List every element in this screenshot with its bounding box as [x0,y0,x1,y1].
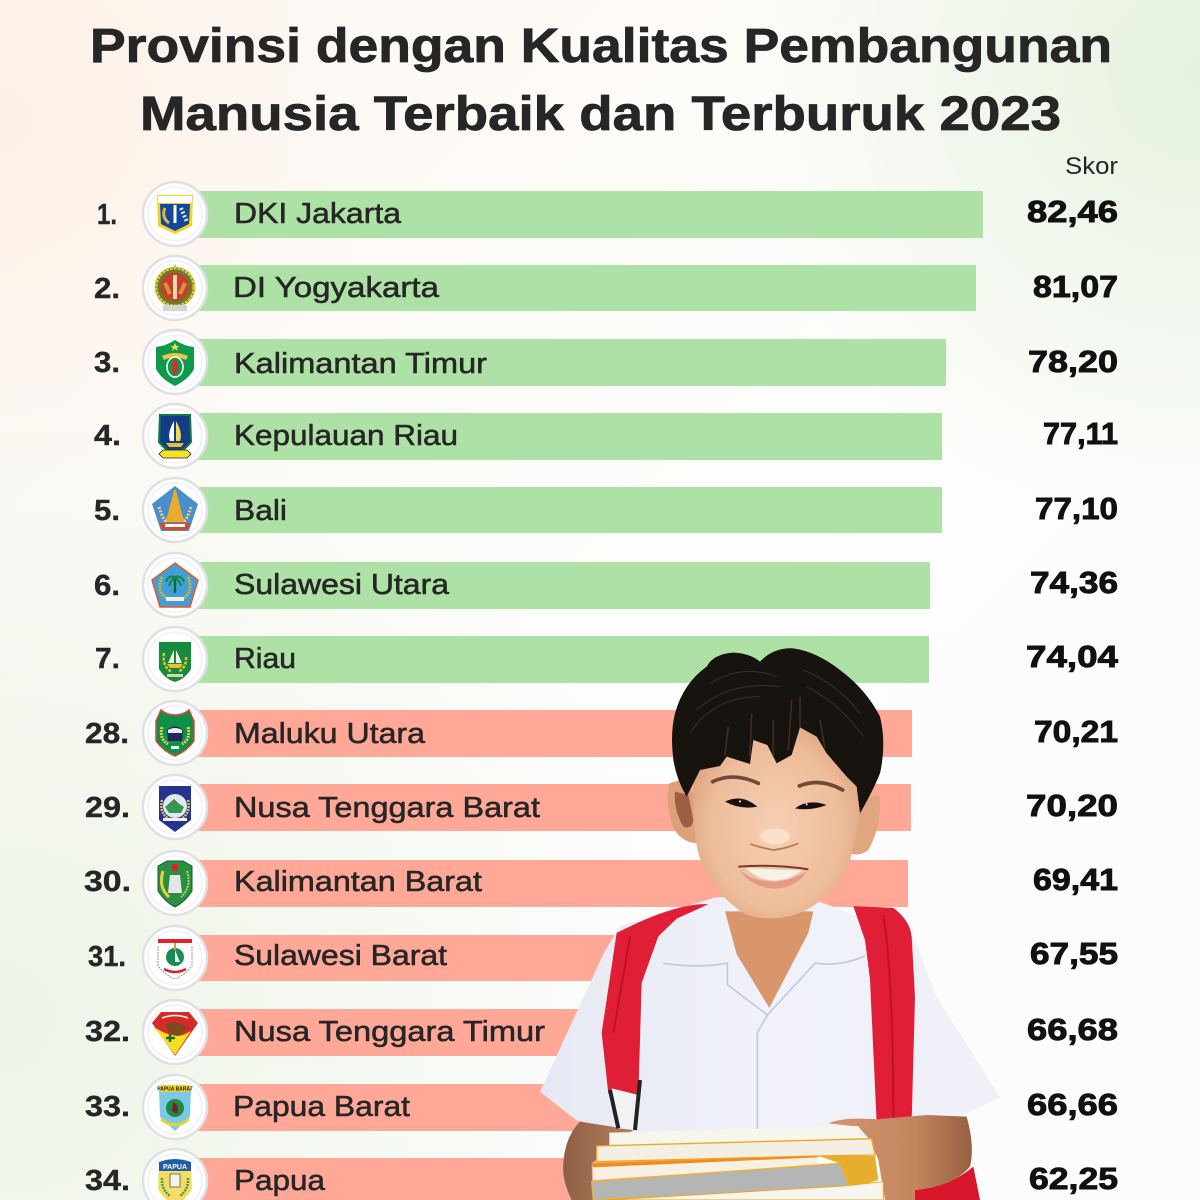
province names: Sulawesi Barat [234,940,447,972]
rank numbers: 29. [85,792,130,824]
province names: Kalimantan Barat [234,866,482,898]
backpack straps [602,904,915,1123]
province names: Kalimantan Timur [234,348,487,380]
neck [725,911,813,1008]
icon: Papua Barat emblem: PAPUA BARAT [157,1086,193,1092]
score values: 70,21 [1034,714,1118,749]
score values: 66,66 [1027,1087,1118,1122]
backpack base [915,1167,980,1200]
ears [668,780,880,854]
rank numbers: 5. [94,495,120,527]
score values: 66,68 [1027,1012,1118,1047]
icon: Kalimantan Timur emblem [156,340,194,386]
face [693,717,859,918]
province names: Papua Barat [233,1091,410,1123]
rank numbers: 28. [85,718,129,750]
rank numbers [84,199,131,1197]
icon: Sulawesi Barat emblem [158,939,192,979]
eyes [725,798,827,809]
hair [672,648,883,813]
bar chart: provincial scores [84,182,1119,1200]
bars: worst provinces [175,710,912,1200]
rank numbers: 33. [85,1091,130,1123]
rank numbers: 1. [97,199,117,231]
score values [1026,194,1119,1196]
rank numbers: 4. [94,420,121,452]
rank numbers: 3. [94,347,120,379]
icon: Kepulauan Riau emblem [159,415,191,458]
score values: 77,10 [1035,491,1118,526]
fringe brown tips [725,697,825,757]
province names: Papua [234,1165,326,1197]
shirt, neck and backpack straps [540,897,1000,1138]
icon: Nusa Tenggara Barat emblem [159,786,191,832]
rank numbers: 30. [84,866,131,898]
score values: 81,07 [1033,269,1118,304]
rank numbers: 31. [88,941,126,973]
province names: Bali [234,495,287,527]
icon: DKI Jakarta emblem [157,195,193,234]
score values: 74,04 [1026,639,1119,674]
smile [738,866,808,889]
title: Manusia Terbaik dan Terburuk 2023 [140,88,1061,141]
badge rings [143,182,207,1200]
icon: Nusa Tenggara Timur emblem [152,1012,198,1056]
score values: 82,46 [1027,194,1118,229]
province names: Nusa Tenggara Barat [234,792,540,824]
icon: Kalimantan Barat emblem [158,861,192,907]
rank numbers: 32. [85,1016,130,1048]
province names: Kepulauan Riau [234,420,458,452]
score values: 69,41 [1033,862,1118,897]
score values: 78,20 [1028,344,1118,379]
score values: 62,25 [1029,1161,1118,1196]
head [668,648,883,918]
icon: DI Yogyakarta emblem [155,264,195,311]
score values: 74,36 [1030,565,1118,600]
province names: DI Yogyakarta [233,272,440,304]
hair strands [690,670,863,737]
right arm and hand [828,1115,972,1200]
icon: Sulawesi Utara emblem [152,563,198,607]
icon: Papua Barat emblem [157,1085,193,1131]
score values: 67,55 [1030,936,1118,971]
left arm [563,1122,633,1200]
rank numbers: 7. [95,643,120,675]
icon: Bali emblem [152,486,198,531]
score values: 70,20 [1026,788,1118,823]
score column heading: Skor [1065,153,1118,180]
score values: 77,11 [1043,416,1118,451]
rank numbers: 2. [94,273,120,305]
province names: Sulawesi Utara [234,569,450,601]
province names: Maluku Utara [234,718,426,750]
province names [233,198,545,1197]
rank numbers: 6. [94,570,120,602]
white shirt [540,897,1000,1138]
icon: Riau emblem [159,642,191,682]
arms, hands and books [563,1080,980,1200]
icon: Papua emblem [158,1159,192,1200]
title [90,20,1112,141]
province names: Riau [234,643,296,675]
province names: Nusa Tenggara Timur [234,1016,545,1048]
book stack [592,1126,883,1200]
icon: Papua emblem: PAPUA [163,1164,187,1171]
icon: Maluku Utara emblem [156,710,194,756]
eyebrows [713,777,843,790]
title: Provinsi dengan Kualitas Pembangunan [90,20,1112,73]
rank numbers: 34. [85,1165,130,1197]
strap shading [613,915,893,1119]
illustration: smiling schoolboy with backpack and books [540,648,1000,1200]
strap buckle [610,1080,640,1130]
nose [750,829,798,850]
bars: best provinces [175,191,983,683]
province names: DKI Jakarta [234,198,402,230]
shirt collar and placket [663,956,865,1129]
